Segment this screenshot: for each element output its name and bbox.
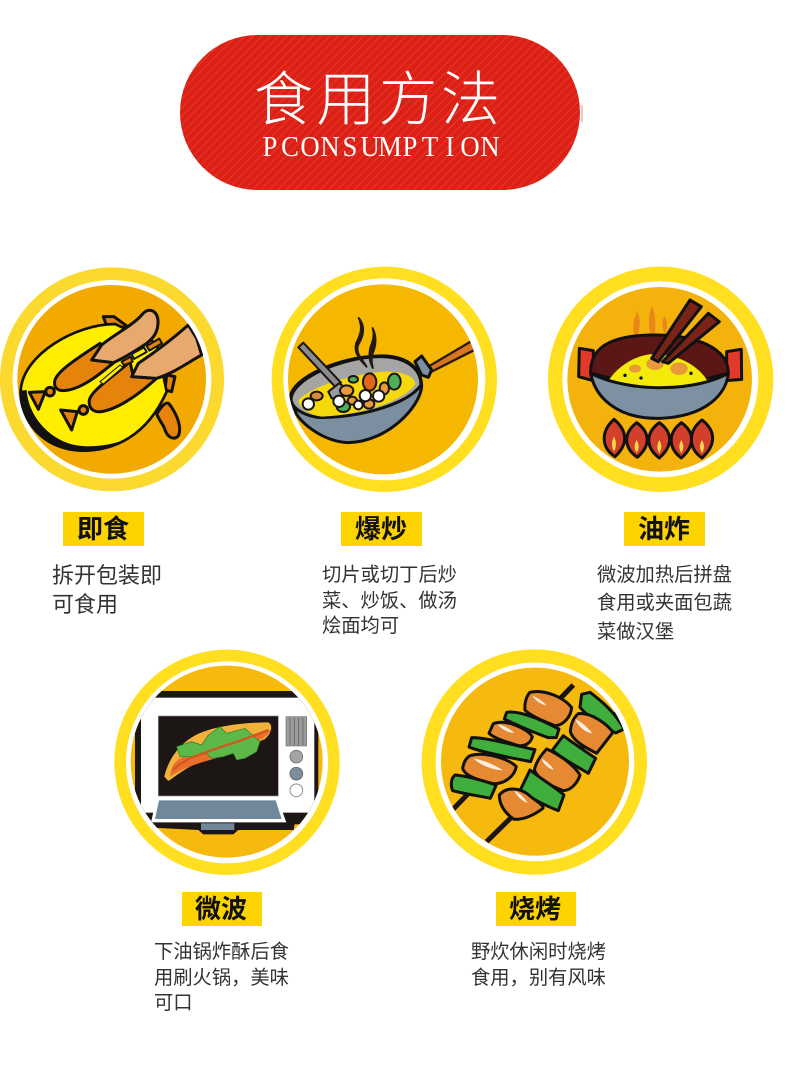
text: microwave description: 可口	[154, 993, 193, 1014]
label: ready to eat: 即食	[77, 514, 129, 544]
label: stir fry: 爆炒	[355, 514, 407, 544]
label: microwave	[182, 892, 262, 926]
icon: sausages on a plate	[0, 267, 224, 491]
label: deep fry: 油炸	[638, 514, 690, 544]
label: barbecue: 烧烤	[509, 894, 561, 924]
text: barbecue description: 食用，别有风味	[471, 967, 606, 989]
panel: ready to eat	[0, 267, 224, 617]
text: deep fry description: 菜做汉堡	[597, 621, 674, 643]
icon: grilled skewers	[422, 649, 647, 875]
text: stir fry description: 烩面均可	[322, 615, 399, 637]
panel: microwave	[114, 650, 340, 1014]
title: English subtitle: PCONSUMPTION	[263, 131, 500, 163]
label: barbecue	[496, 892, 576, 926]
title banner	[180, 35, 583, 190]
text: ready to eat description: 可食用	[52, 592, 118, 617]
title: Chinese heading: 食用方法	[254, 52, 500, 137]
panel: deep fry	[548, 267, 773, 643]
icon: pot on flames	[548, 267, 773, 492]
text: ready to eat description: 拆开包装即	[52, 563, 162, 588]
text: microwave description: 用刷火锅，美味	[154, 967, 289, 989]
icon: microwave oven with sandwich	[114, 650, 340, 875]
label: deep fry	[624, 512, 705, 546]
text: deep fry description: 微波加热后拼盘	[597, 564, 732, 586]
panel: barbecue	[422, 649, 647, 989]
text: stir fry description: 切片或切丁后炒	[322, 564, 457, 586]
text: stir fry description: 菜、炒饭、做汤	[322, 590, 457, 612]
text: microwave description: 下油锅炸酥后食	[154, 941, 289, 963]
label: microwave: 微波	[195, 894, 247, 924]
label: ready to eat	[63, 512, 144, 546]
label: stir fry	[341, 512, 422, 546]
text: barbecue description: 野炊休闲时烧烤	[471, 941, 606, 963]
text: deep fry description: 食用或夹面包蔬	[597, 592, 732, 614]
panel: stir fry	[272, 267, 497, 637]
icon: wok with vegetables	[272, 267, 497, 492]
